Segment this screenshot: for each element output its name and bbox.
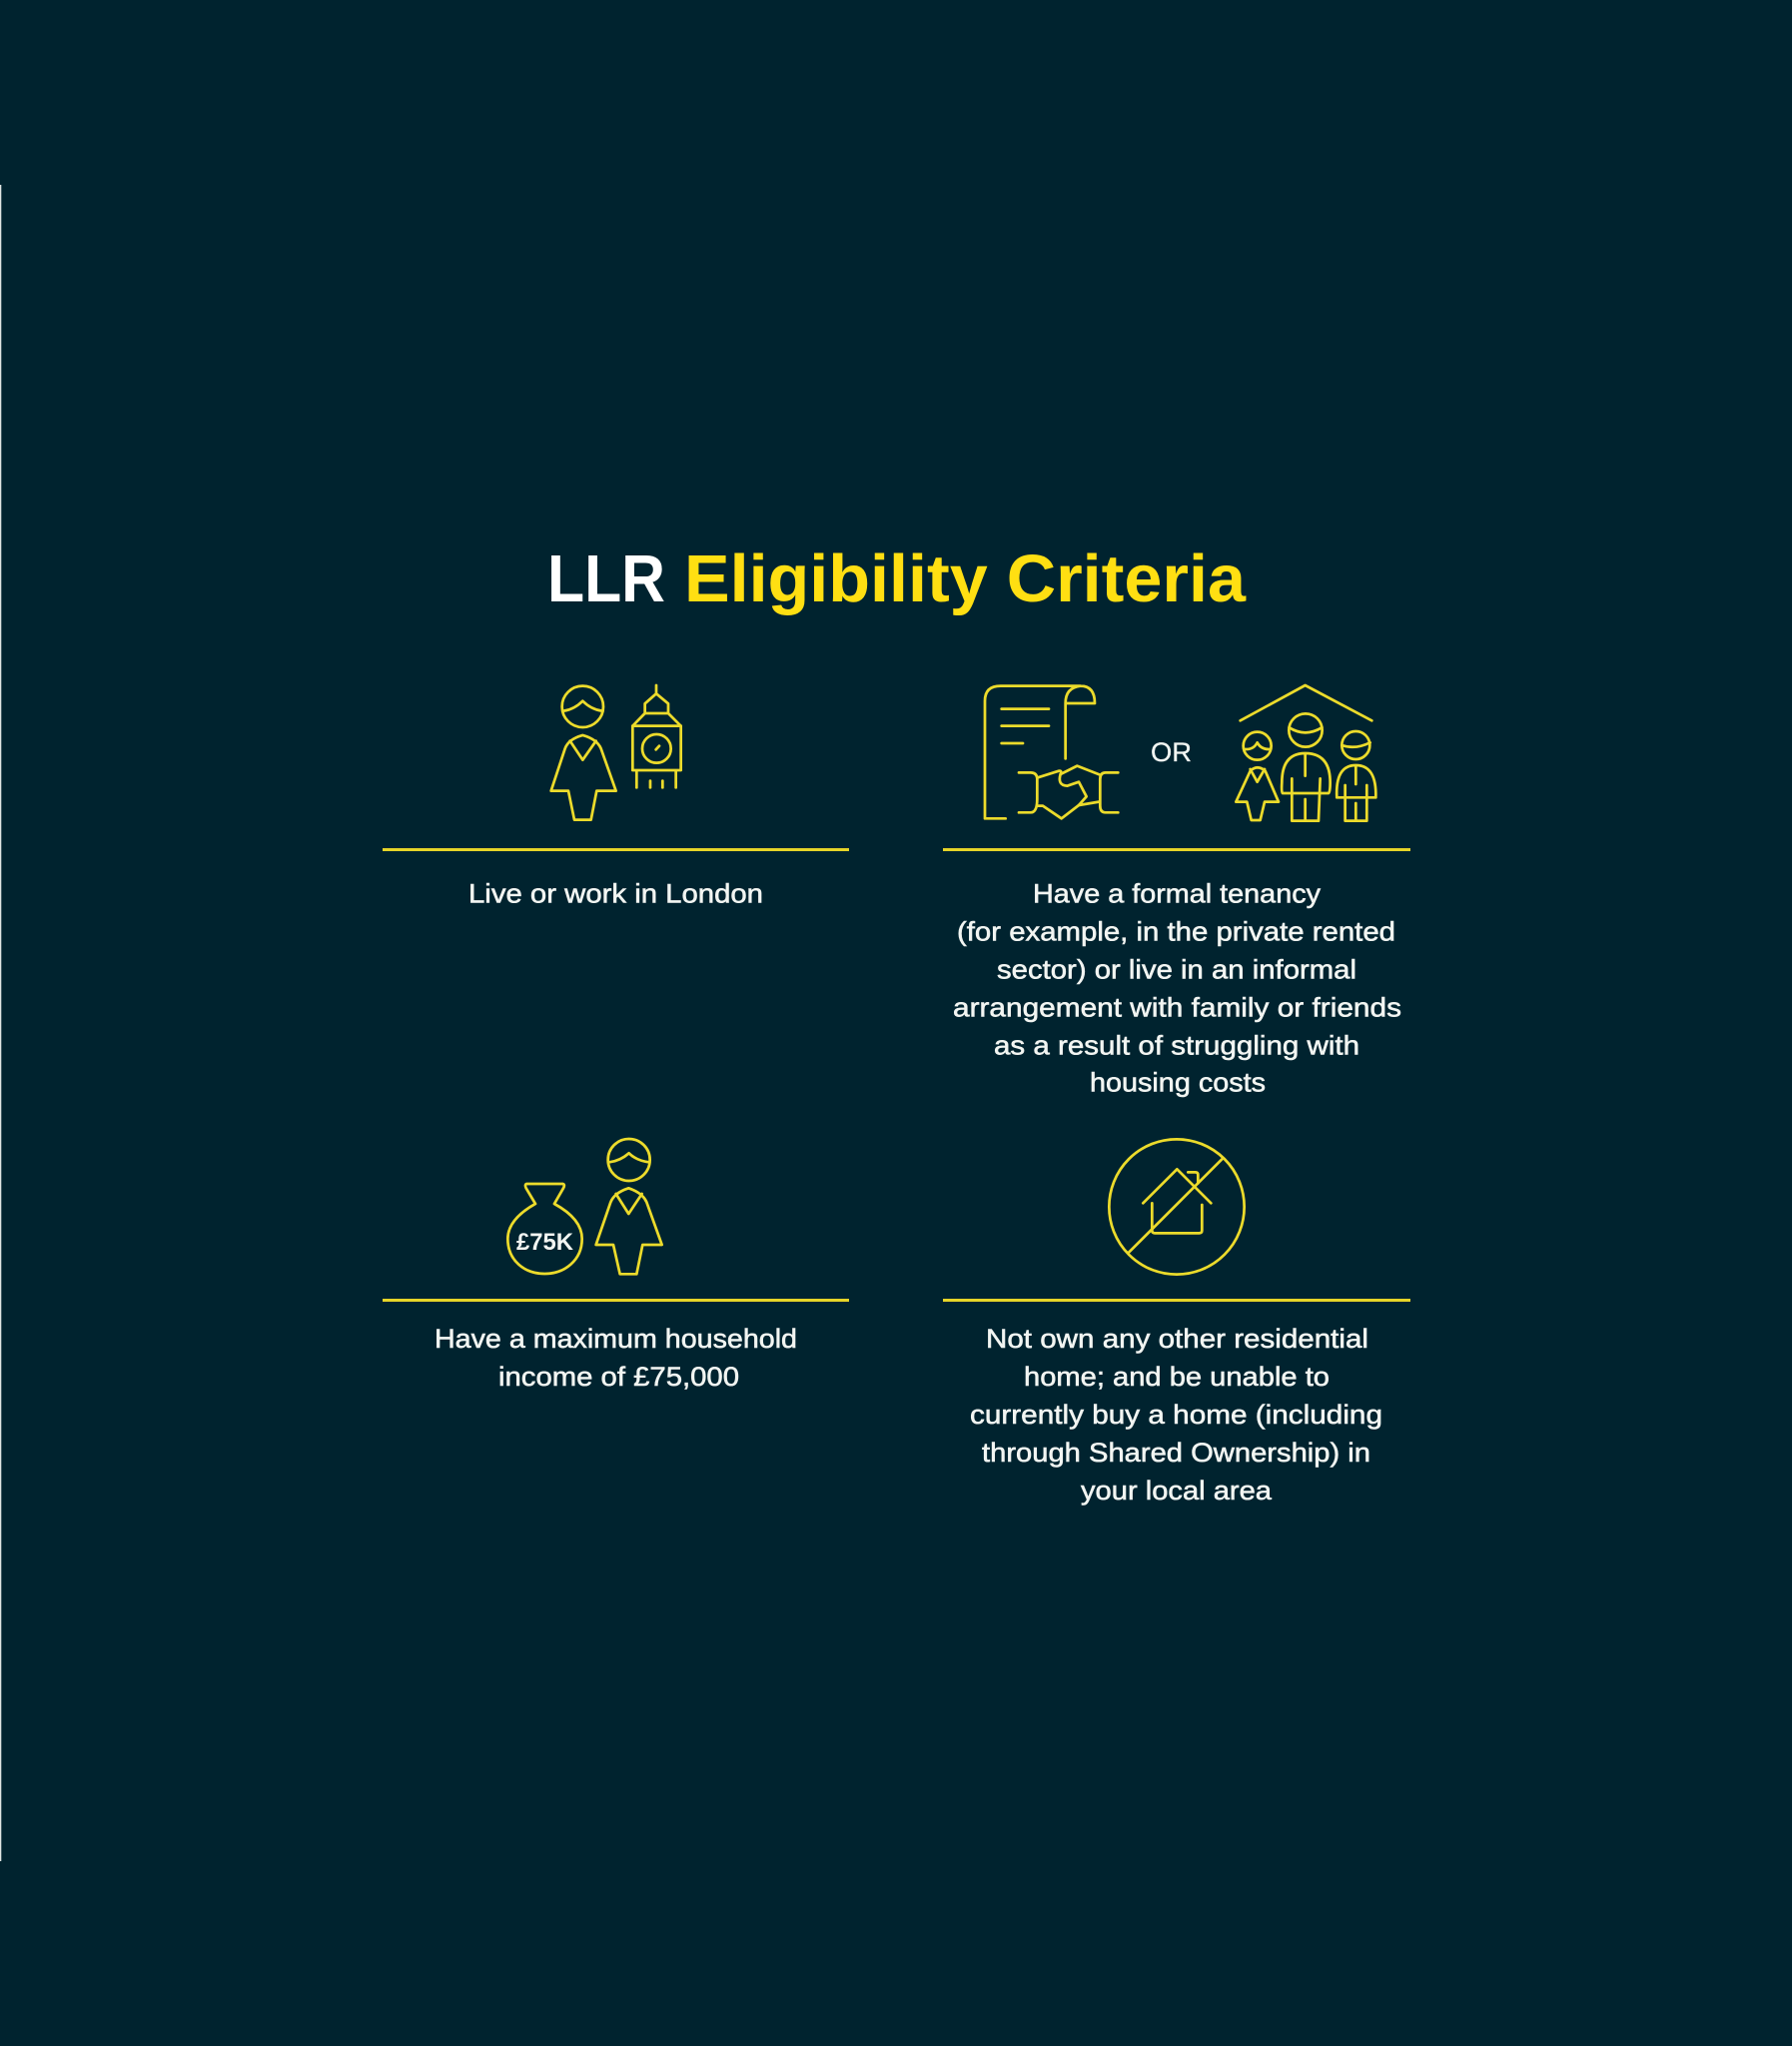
caption: formal tenancy bbox=[953, 879, 1401, 1097]
icon: crossed-out house bbox=[1109, 1139, 1245, 1275]
label: OR: OR bbox=[1151, 737, 1192, 767]
caption: live or work: Live or work in London bbox=[468, 879, 763, 909]
caption: not own a home: Not own any other residential bbox=[986, 1324, 1368, 1354]
caption: not own a home bbox=[970, 1324, 1382, 1506]
caption: formal tenancy: housing costs bbox=[1090, 1067, 1266, 1097]
caption: maximum income: Have a maximum household bbox=[435, 1324, 797, 1354]
caption: not own a home: home; and be unable to bbox=[1024, 1362, 1330, 1392]
caption: formal tenancy: arrangement with family or friends bbox=[953, 993, 1401, 1023]
panel: no other home bbox=[943, 1139, 1410, 1506]
label: £75K: £75K bbox=[516, 1229, 574, 1256]
icon: person and Big Ben bbox=[551, 685, 681, 820]
caption: maximum income: income of £75,000 bbox=[498, 1362, 739, 1392]
caption: not own a home: through Shared Ownership) in bbox=[982, 1438, 1370, 1468]
caption: not own a home: currently buy a home (including bbox=[970, 1400, 1382, 1430]
icon: tenancy document and handshake bbox=[985, 686, 1118, 818]
caption: formal tenancy: as a result of struggling with bbox=[994, 1031, 1359, 1061]
icon: money bag and person bbox=[507, 1139, 662, 1274]
caption: formal tenancy: Have a formal tenancy bbox=[1033, 879, 1322, 909]
title: LLR bbox=[547, 542, 665, 616]
icon: family under a roof bbox=[1236, 685, 1375, 821]
panel: live or work in London bbox=[383, 685, 849, 909]
caption: formal tenancy: (for example, in the private rented bbox=[957, 917, 1395, 947]
caption: maximum income bbox=[435, 1324, 797, 1392]
caption: not own a home: your local area bbox=[1081, 1476, 1272, 1506]
panel: tenancy or informal arrangement bbox=[943, 685, 1410, 1097]
title: Eligibility Criteria bbox=[684, 542, 1247, 616]
caption: formal tenancy: sector) or live in an informal bbox=[997, 955, 1356, 985]
panel: household income bbox=[383, 1139, 849, 1392]
